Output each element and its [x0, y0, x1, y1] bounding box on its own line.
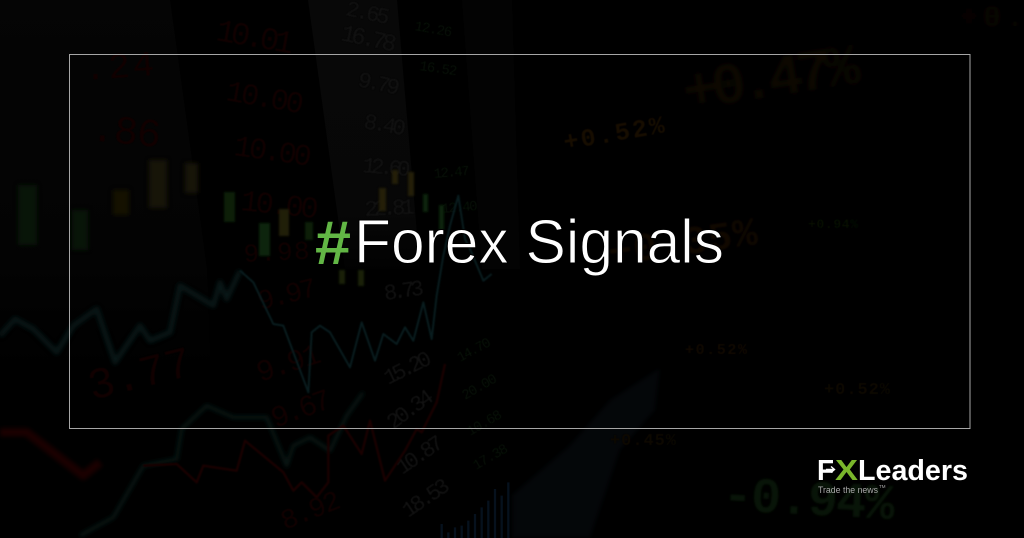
background: grey price numbers: 22.81 — [364, 195, 415, 223]
background: grey price numbers: 10.87 — [392, 431, 449, 481]
background: red price numbers: .24 — [83, 45, 156, 91]
logo mark arrow — [826, 466, 834, 472]
background: percentage readouts: +0.52% — [685, 342, 748, 359]
background: red price numbers: 9.67 — [267, 384, 337, 437]
background: red price numbers: 3.77 — [83, 340, 197, 414]
background: percentage readouts: +0. — [960, 2, 1024, 36]
background: grey price numbers: 8.40 — [362, 110, 407, 142]
background: red price numbers: 9.97 — [255, 274, 320, 319]
background: second teal line — [80, 392, 363, 536]
heading text: Forex Signals — [354, 208, 724, 277]
background: percentage readouts — [561, 2, 1024, 535]
background: grey price numbers: 8.73 — [382, 277, 426, 307]
background: teal price line — [0, 196, 492, 392]
background: red price numbers: 8.92 — [277, 486, 346, 538]
frame — [70, 54, 970, 428]
hash mark: # — [315, 209, 351, 278]
logo: FXLeaders — [817, 455, 968, 495]
background: percentage readouts: +0.94% — [808, 217, 858, 232]
background: green price numbers: 12.47 — [433, 164, 470, 183]
background: percentage readouts: +0.52% — [824, 381, 891, 400]
background: red price numbers: 10.00 — [232, 131, 314, 176]
background: red price numbers: 9.98 — [243, 237, 310, 270]
background: grey price numbers: 9.79 — [356, 68, 402, 102]
background: green price numbers: 12.26 — [413, 19, 453, 42]
trademark: TM — [879, 484, 886, 489]
background: grey price numbers: 20.34 — [382, 385, 439, 436]
background: green price numbers: 10.68 — [464, 407, 505, 440]
background: green price numbers: 20.00 — [460, 371, 500, 404]
logo mark F: F — [817, 455, 834, 487]
background: red price numbers: 10.01 — [213, 13, 297, 63]
background: grey price numbers: 18.53 — [398, 474, 455, 524]
background: percentage readouts: +0.52% — [561, 111, 668, 158]
background: red price numbers — [83, 13, 346, 538]
background: grey price numbers: 16.78 — [338, 21, 399, 59]
background: blue volume streak — [512, 368, 660, 538]
background: red price numbers: 9.91 — [253, 339, 326, 392]
background: percentage readouts: -0.94% — [721, 469, 897, 535]
background: grey price numbers: 12.60 — [361, 154, 411, 183]
background: red price numbers: 10.00 — [239, 186, 320, 228]
background: percentage readouts: +0.35% — [606, 212, 761, 278]
background: blue bar histogram — [442, 482, 508, 538]
background: green price numbers: 14.70 — [455, 335, 494, 366]
logo mark X: X — [835, 455, 859, 487]
background: grey price numbers — [338, 0, 455, 524]
background: green price numbers: 17.38 — [470, 441, 511, 474]
background: green price numbers — [413, 19, 511, 474]
background: red price numbers: 10.00 — [223, 76, 306, 123]
background: percentage readouts: +0.47% — [679, 36, 865, 128]
title: #Forex Signals — [315, 208, 724, 278]
background: green price numbers: 12.40 — [441, 199, 478, 218]
background panel: price table — [0, 0, 520, 400]
background: candlestick chart — [18, 160, 444, 286]
logo word Leaders: Leaders — [858, 455, 968, 487]
tagline: Trade the news — [818, 485, 878, 495]
background: grey price numbers: 15.20 — [380, 347, 436, 391]
background: percentage readouts: +0.45% — [610, 432, 677, 451]
background: red price line — [0, 364, 445, 497]
background: green price numbers: 16.52 — [418, 59, 458, 80]
background: red price numbers: .86 — [89, 108, 163, 160]
